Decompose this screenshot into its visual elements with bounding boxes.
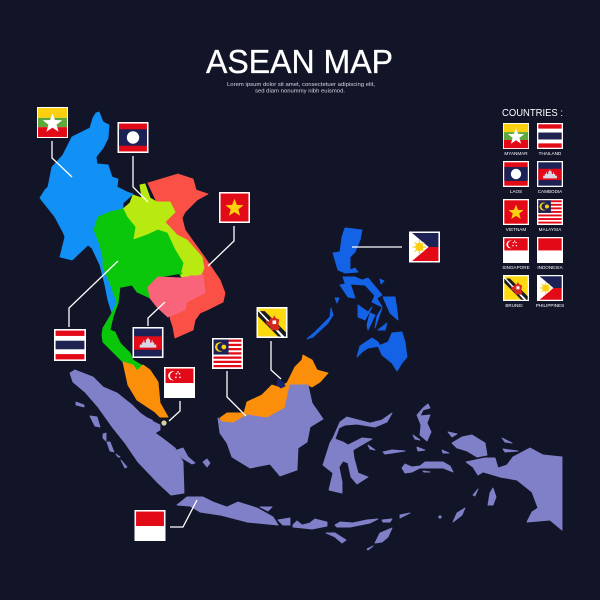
country: Cambodia [148, 275, 205, 317]
country: Malaysia [123, 355, 328, 423]
map [40, 112, 562, 550]
country: Laos [123, 184, 204, 280]
legend labels: LAOS [510, 189, 522, 194]
subtitle: Lorem ipsum dolor sit amet, consectetuer adipiscing elit, [227, 82, 376, 88]
legend flags [503, 123, 563, 301]
legend labels: INDONESIA [537, 265, 564, 270]
subtitle: sed diam nonummy nibh euismod. [255, 88, 346, 94]
legend labels: MYANMAR [504, 151, 528, 156]
flag: Myanmar [37, 107, 68, 138]
legend labels [502, 151, 564, 308]
country: Singapore [161, 420, 167, 426]
country: Vietnam [148, 174, 225, 338]
flag: Cambodia [132, 327, 164, 358]
title: ASEAN MAP [206, 43, 393, 80]
flag: Brunei [256, 307, 288, 338]
flag: Singapore [164, 367, 195, 398]
flag: Vietnam [219, 192, 250, 223]
island: Borneo [218, 385, 323, 476]
legend labels: MALAYSIA [539, 227, 562, 232]
legend heading: COUNTRIES : [502, 108, 563, 119]
flag: Indonesia [134, 510, 166, 541]
country: Indonesia [70, 370, 562, 550]
flag: Philippines [409, 232, 440, 262]
leader lines [52, 141, 402, 527]
country: Myanmar [40, 112, 133, 313]
legend panel [502, 108, 564, 308]
country: Philippines [307, 228, 407, 371]
legend labels: CAMBODIA [538, 189, 563, 194]
country: Thailand [94, 209, 183, 372]
island: Maluku [402, 404, 457, 473]
legend labels: PHILIPPINES [536, 303, 564, 308]
flag: Malaysia [212, 338, 243, 369]
subtitle [227, 82, 376, 94]
island: Sulawesi [323, 413, 405, 493]
country: Brunei [277, 379, 285, 388]
legend labels: SINGAPORE [502, 265, 530, 270]
island: Papua [400, 435, 562, 530]
flag: Laos [118, 122, 148, 153]
legend labels: VIETNAM [506, 227, 526, 232]
legend labels: THAILAND [539, 151, 562, 156]
island: Java and Lesser Sunda [177, 497, 392, 550]
legend labels: BRUNEI [505, 303, 523, 308]
flag: Thailand [54, 329, 86, 361]
island: Sumatra [70, 370, 210, 495]
